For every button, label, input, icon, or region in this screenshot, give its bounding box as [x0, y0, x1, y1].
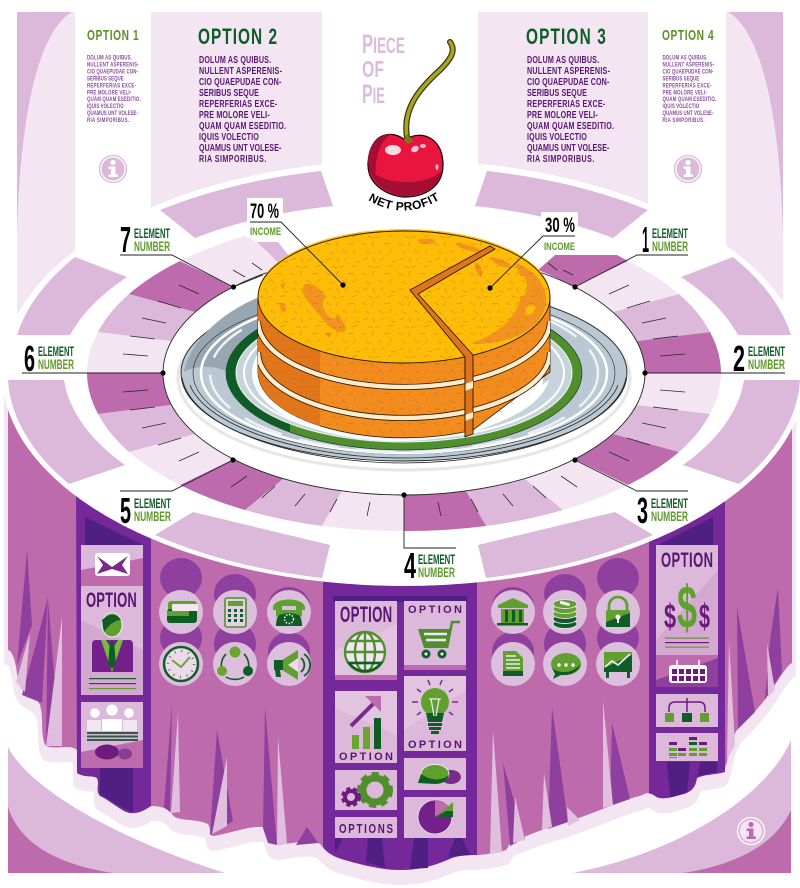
option 2 body: SERIBUS SEQUE: [199, 87, 259, 98]
left column panel: option person: [81, 586, 143, 695]
element label 7: [120, 219, 263, 290]
element label 4: 4: [404, 545, 416, 586]
title: [362, 29, 405, 109]
element label 5: 5: [120, 490, 131, 531]
right column panel: calendar: [656, 655, 718, 687]
cherry: [368, 42, 453, 197]
tick marks on ring: [123, 263, 685, 516]
option 2 body: QUAM QUAM ESEDITIO.: [199, 120, 286, 131]
callout: 30 percent: 30 %: [545, 214, 575, 237]
callout: 70 percent: INCOME: [250, 226, 281, 238]
cake side: [258, 297, 550, 438]
icon: bank: [491, 590, 535, 634]
option 1 body: RIA SIMPORIBUS.: [87, 117, 130, 124]
option 3 body: IQUIS VOLECTIO: [527, 131, 587, 142]
option 4 body: SERIBUS SEQUE: [662, 76, 699, 83]
element label 6: ELEMENT: [38, 344, 74, 359]
option 4 body: DOLUM AS QUIBUS.: [662, 55, 708, 62]
left column: [76, 480, 151, 813]
element label 4: [401, 492, 456, 586]
panel: option 2 background: [151, 12, 322, 222]
icon: clock: [159, 642, 203, 686]
option 3 body: REPERFERIAS EXCE-: [527, 98, 605, 109]
centre panel: options label: [335, 817, 397, 838]
right column: [649, 480, 725, 798]
left column panel: team: [81, 702, 143, 768]
callout: 70 percent: [247, 198, 346, 288]
panel: option 3 background: [478, 12, 648, 222]
element label 1: NUMBER: [652, 239, 688, 254]
cake: [258, 229, 552, 445]
circle backdrops: [160, 558, 639, 672]
option 1 body: REPERFERIAS EXCE-: [87, 83, 136, 90]
net profit label: NET PROFIT: [368, 192, 438, 210]
option 1 body: [87, 55, 141, 124]
option 4 body: CIO QUAEPUDAE CON-: [662, 69, 714, 76]
element label 3: [572, 457, 688, 531]
cake top: [258, 229, 550, 361]
option 2 heading: OPTION 2: [198, 25, 277, 50]
element label 6: [22, 338, 166, 379]
right column panel: option dollars: [656, 545, 718, 655]
option 1 body: CIO QUAEPUDAE CON-: [87, 69, 138, 76]
element label 7: 7: [120, 219, 131, 260]
curtain backing wave: [8, 391, 792, 881]
plate: [163, 251, 645, 495]
option 1: [87, 26, 141, 124]
option 4 body: REPERFERIAS EXCE-: [662, 83, 712, 90]
option 2 body: REPERFERIAS EXCE-: [199, 98, 277, 109]
panel: left edge strip: [17, 12, 75, 337]
option 3 body: QUAMUS UNT VOLESE-: [527, 142, 609, 153]
right column panel: option dollars: $: [699, 598, 710, 636]
element label 7: NUMBER: [134, 239, 170, 254]
icon: speech bubble: [543, 642, 587, 686]
option 2 body: RIA SIMPORIBUS.: [199, 153, 266, 164]
option 3 body: CIO QUAEPUDAE CON-: [527, 76, 609, 87]
option 1 body: IQUIS VOLECTIO: [87, 104, 124, 111]
option 1 body: SERIBUS SEQUE: [87, 76, 124, 83]
option 2: [198, 25, 286, 164]
centre panel: pie chart: [404, 797, 466, 838]
centre panel: option chart: OPTION: [339, 751, 393, 763]
option 2 body: IQUIS VOLECTIO: [199, 131, 259, 142]
option 2 body: QUAMUS UNT VOLESE-: [199, 142, 281, 153]
centre panel: option bulb: OPTION: [408, 739, 462, 751]
option 4: [662, 26, 717, 124]
option 3 body: DOLUM AS QUIBUS.: [527, 54, 599, 65]
right column panel: option dollars: $: [677, 574, 697, 641]
option 3 heading: OPTION 3: [526, 25, 606, 50]
cherry body: [368, 134, 443, 197]
element label 7: ELEMENT: [134, 226, 170, 241]
option 3 body: QUAM QUAM ESEDITIO.: [527, 120, 614, 131]
right column panel: option dollars: $: [664, 598, 676, 636]
centre panel: gears: [335, 770, 397, 810]
element label 2: [642, 338, 785, 379]
centre panel: option chart: [335, 691, 397, 763]
centre panel: option globe: [335, 601, 397, 680]
right column panel: option dollars: OPTION: [661, 548, 713, 572]
cherry stem: [406, 42, 453, 142]
element label 1: [572, 219, 688, 290]
crust blotches: [279, 239, 546, 344]
slice cut: [410, 246, 495, 437]
callout: 30 percent: INCOME: [544, 241, 575, 253]
callout: 30 percent: [487, 212, 578, 291]
option 4 body: PRE MOLORE VELI-: [662, 90, 707, 97]
option 3 body: PRE MOLORE VELI-: [527, 109, 598, 120]
option 3 body: RIA SIMPORIBUS.: [527, 153, 594, 164]
option 1 body: PRE MOLORE VELI-: [87, 90, 131, 97]
element label 6: NUMBER: [38, 357, 74, 372]
centre panel: option cart: OPTION: [408, 604, 462, 616]
left column panel: envelope: [81, 545, 143, 586]
element label 5: [120, 457, 236, 531]
option 4 body: QUAM QUAM ESEDITIO.: [662, 97, 717, 104]
element label 3: 3: [637, 490, 648, 531]
left column panel: option person: OPTION: [86, 588, 137, 612]
element label 5: NUMBER: [134, 509, 171, 524]
icon: credit cards: [159, 590, 203, 634]
option 3: [526, 25, 614, 164]
element label 2: 2: [733, 338, 745, 379]
icon: info bottom: [738, 818, 764, 844]
outer ring segments: [8, 171, 800, 578]
bottom right crescent: [573, 740, 791, 873]
bottom left crescent: [8, 747, 225, 873]
option 1 body: QUAM QUAM ESEDITIO.: [87, 97, 141, 104]
icon: info right: [674, 156, 702, 182]
white disc of table: [2, 160, 800, 586]
callout: 70 percent: 70 %: [250, 200, 279, 223]
icon: coins: [543, 590, 587, 634]
element label 3: ELEMENT: [651, 496, 688, 511]
panel: right edge strip: [726, 12, 783, 337]
element label 5: ELEMENT: [134, 496, 171, 511]
option 4 body: NULLENT ASPERENIS-: [662, 62, 714, 69]
option 2 body: NULLENT ASPERENIS-: [199, 65, 282, 76]
cream layers: [258, 321, 550, 418]
centre panel: chat bubbles: [404, 758, 466, 790]
centre panel: option cart: [404, 601, 466, 670]
icon: telephone: [267, 590, 311, 634]
icon: megaphone: [267, 642, 311, 686]
option 2 body: PRE MOLORE VELI-: [199, 109, 270, 120]
element label 1: ELEMENT: [652, 226, 688, 241]
element label 3: NUMBER: [651, 509, 688, 524]
option 3 body: [527, 54, 614, 164]
title: PIECE: [362, 29, 405, 59]
icon: network: [213, 642, 257, 686]
right column panel: equaliser: [656, 733, 718, 761]
centre column: [323, 560, 477, 870]
option 4 body: RIA SIMPORIBUS.: [662, 117, 705, 124]
icon: chart board: [596, 642, 640, 686]
option 4 body: IQUIS VOLECTIO: [662, 104, 700, 111]
centre panel: option bulb: [404, 676, 466, 751]
option 3 body: NULLENT ASPERENIS-: [527, 65, 610, 76]
icon: calculator: [213, 590, 257, 634]
icon: info left: [100, 156, 126, 182]
title: OF: [362, 56, 384, 82]
icon: lock: [596, 590, 640, 634]
option 1 body: DOLUM AS QUIBUS.: [87, 55, 132, 62]
option 4 heading: OPTION 4: [662, 26, 714, 44]
option 4 body: [662, 55, 717, 124]
option 4 body: QUAMUS UNT VOLESE-: [662, 110, 714, 117]
element label 4: ELEMENT: [418, 552, 455, 567]
option 2 body: DOLUM AS QUIBUS.: [199, 54, 271, 65]
option 1 body: NULLENT ASPERENIS-: [87, 62, 139, 69]
option 2 body: [199, 54, 286, 164]
option 3 body: SERIBUS SEQUE: [527, 87, 587, 98]
option 1 body: QUAMUS UNT VOLESE-: [87, 110, 138, 117]
option 1 heading: OPTION 1: [87, 26, 139, 44]
element label 6: 6: [24, 338, 35, 379]
element label 4: NUMBER: [418, 565, 455, 580]
element label 1: 1: [642, 219, 649, 260]
curtain: [8, 380, 792, 870]
inner ring segments: [87, 236, 721, 531]
centre panel: options label: OPTIONS: [339, 823, 393, 836]
centre panel: option globe: OPTION: [340, 603, 392, 627]
icon: document: [491, 642, 535, 686]
title: PIE: [362, 79, 385, 109]
option 2 body: CIO QUAEPUDAE CON-: [199, 76, 281, 87]
right column panel: hierarchy: [656, 694, 718, 727]
